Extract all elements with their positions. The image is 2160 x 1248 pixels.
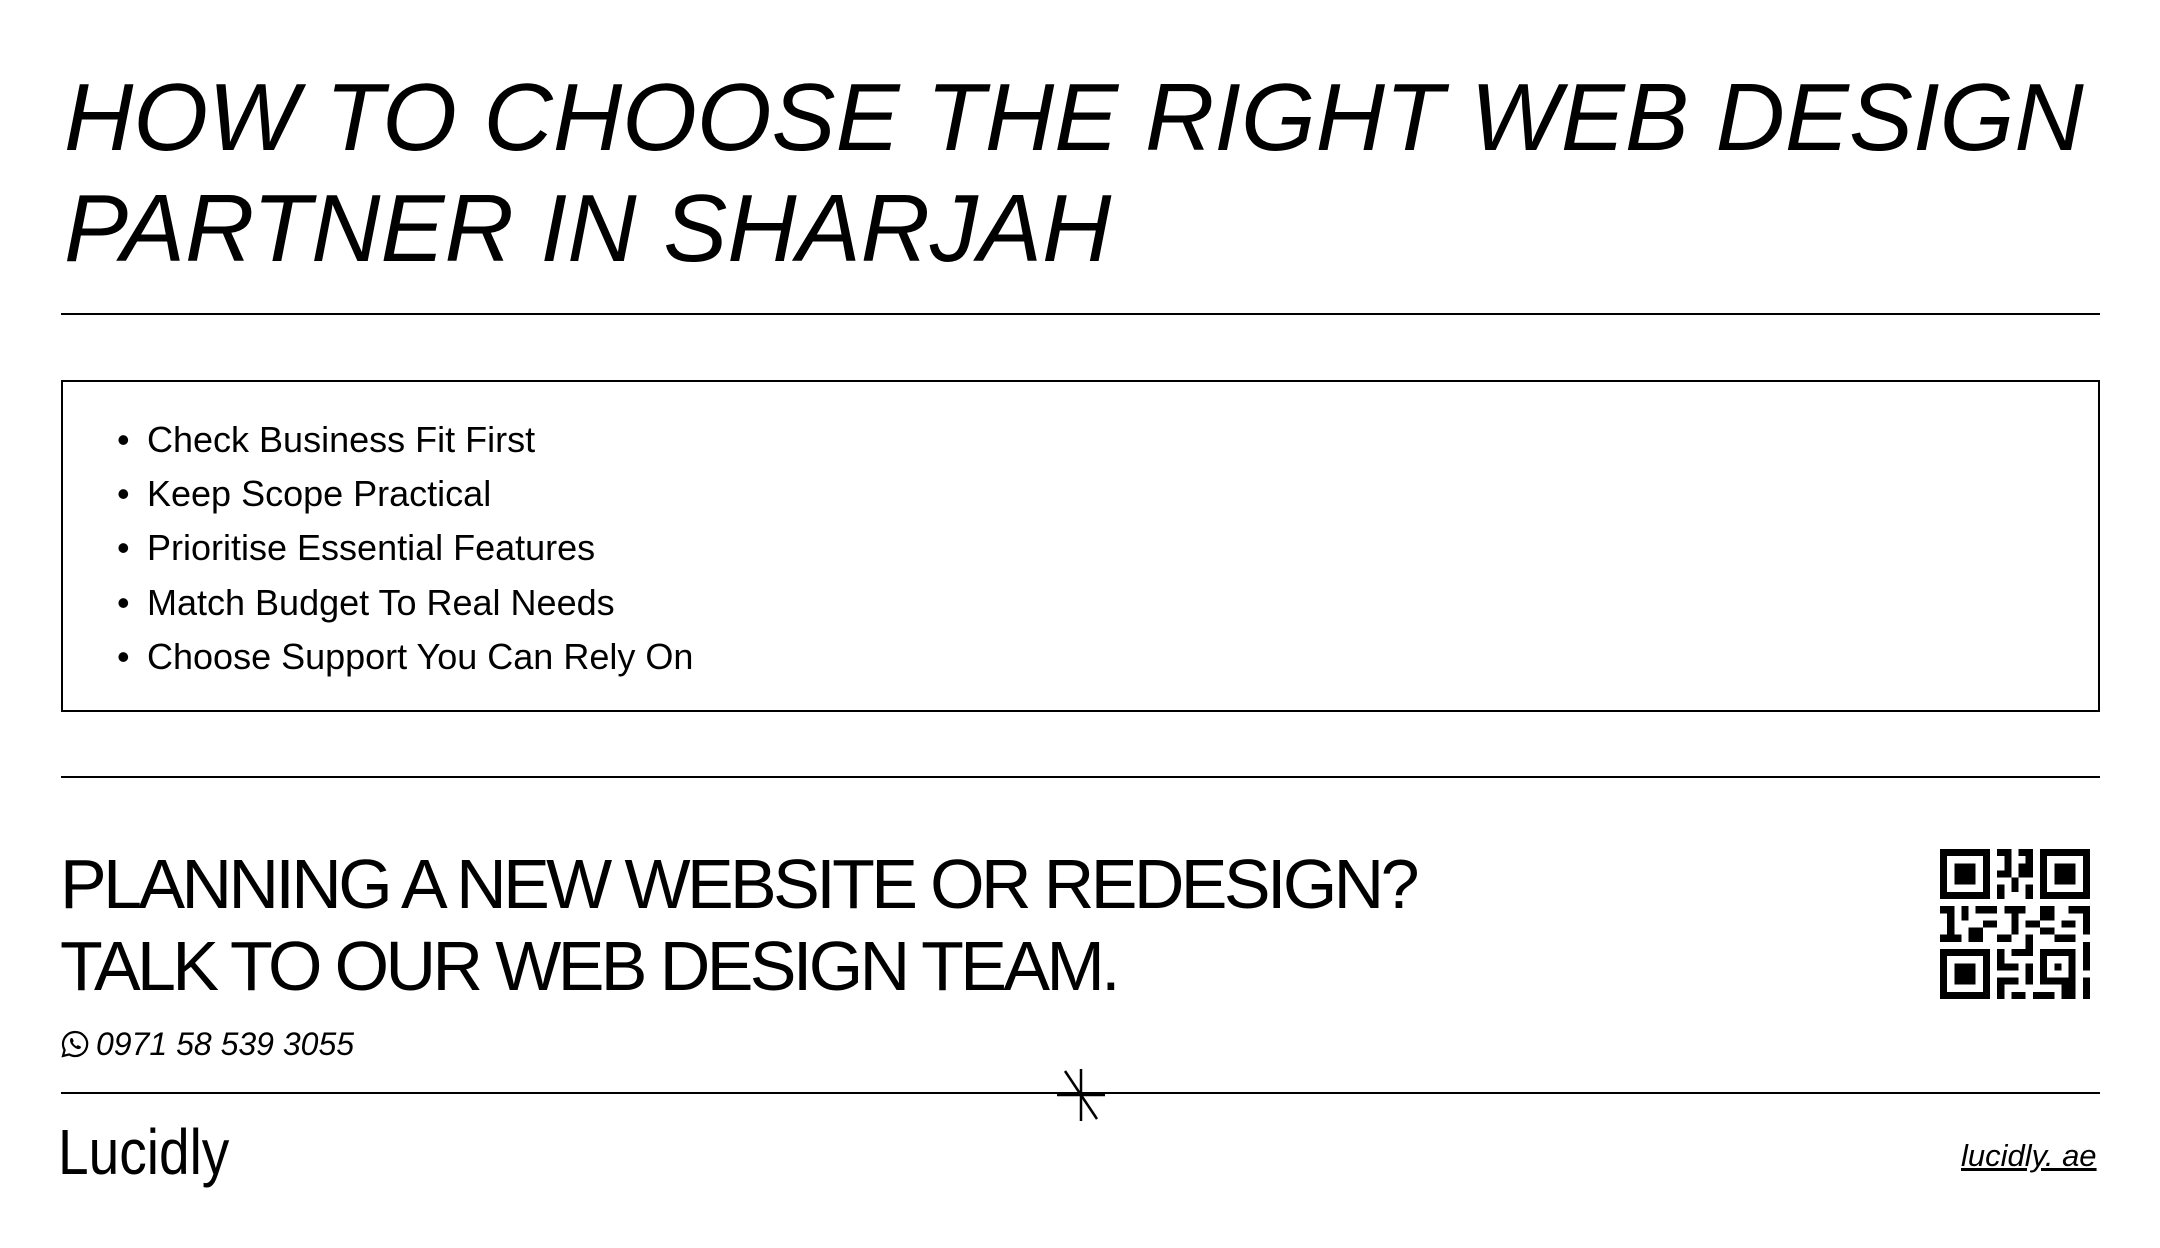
bullet: prioritise features: Prioritise Essential Features [147, 527, 595, 568]
cta heading: TALK TO OUR WEB DESIGN TEAM. [60, 927, 1117, 1005]
bullet: choose support: Choose Support You Can Rely On [147, 636, 693, 677]
qr code [1940, 849, 2090, 999]
panel: checklist: • [117, 419, 130, 460]
bullet: check business fit: Check Business Fit First [147, 419, 535, 460]
cta heading [60, 845, 1417, 1005]
logo: Lucidly: Lucidly [58, 1116, 229, 1188]
panel: checklist: • [117, 473, 130, 514]
title [64, 64, 2084, 282]
website link: lucidly. ae [1961, 1138, 2097, 1173]
bullet: match budget: Match Budget To Real Needs [147, 582, 615, 623]
icon: crosshair star [1057, 1069, 1105, 1121]
bullet: keep scope practical: Keep Scope Practical [147, 473, 491, 514]
panel: checklist: • [117, 527, 130, 568]
cta heading: PLANNING A NEW WEBSITE OR REDESIGN? [60, 845, 1416, 923]
panel: checklist: • [117, 582, 130, 623]
panel: checklist: • [117, 636, 130, 677]
title: PARTNER IN SHARJAH [64, 175, 1111, 282]
panel: checklist [61, 380, 2100, 712]
title: HOW TO CHOOSE THE RIGHT WEB DESIGN [64, 64, 2084, 171]
phone contact: 0971 58 539 3055 [96, 1026, 354, 1062]
icon: whatsapp [62, 1030, 88, 1058]
